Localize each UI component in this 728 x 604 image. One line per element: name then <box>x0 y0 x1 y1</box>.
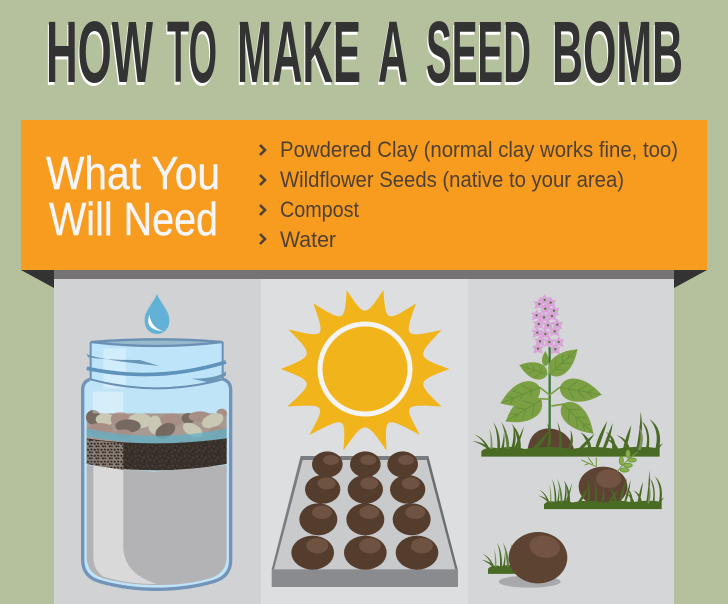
icon: water drop <box>145 294 169 334</box>
seed ball <box>579 467 627 507</box>
grass <box>473 412 663 457</box>
title: A <box>377 7 407 104</box>
title: A <box>378 4 408 101</box>
ingredient list <box>260 137 678 252</box>
icon: glass jar <box>83 339 231 589</box>
ball shadow <box>499 576 561 588</box>
seed balls <box>291 451 438 570</box>
banner shadow <box>54 270 674 279</box>
stones layer <box>86 409 227 443</box>
title: SEED <box>425 7 530 104</box>
water band <box>87 428 227 445</box>
title <box>45 4 683 104</box>
glass highlight <box>93 392 123 413</box>
jar neck <box>91 342 223 387</box>
title: HOW <box>46 4 153 101</box>
title: MAKE <box>237 4 361 101</box>
ribbon fold right <box>674 270 707 288</box>
title: SEED <box>426 4 531 101</box>
ingredient list: Compost <box>280 197 359 222</box>
heading: what you will need: Will Need <box>49 193 218 245</box>
ribbon fold left <box>21 270 54 288</box>
icon: grown plant on grass <box>473 294 663 457</box>
ingredient list: Water <box>280 227 336 252</box>
panel: step 3 background <box>468 270 674 604</box>
ingredient list: Powdered Clay (normal clay works fine, too) <box>280 137 678 162</box>
soil layer <box>87 438 227 470</box>
seed ball <box>509 532 567 583</box>
ingredient list: Wildflower Seeds (native to your area) <box>280 167 624 192</box>
title: TO <box>166 7 216 104</box>
jar outline <box>83 379 231 589</box>
icon: seed ball on ground <box>481 532 624 588</box>
icon: drying tray with seed balls <box>272 451 458 587</box>
title: MAKE <box>236 7 360 104</box>
grass <box>538 470 664 509</box>
panel: step 1 background <box>54 270 261 604</box>
mound <box>527 428 575 452</box>
tray <box>272 456 458 569</box>
stem <box>546 347 553 430</box>
jar threads <box>87 354 159 366</box>
title: TO <box>167 4 217 101</box>
sand layer <box>87 465 227 585</box>
title: HOW <box>45 7 152 104</box>
jar body glass <box>83 379 231 589</box>
icon: sun <box>281 290 449 451</box>
panel: step 2 background <box>261 270 468 604</box>
sprouts <box>581 450 638 472</box>
grass tuft <box>482 542 516 574</box>
heading: what you will need: What You <box>46 147 220 199</box>
leaves <box>496 377 544 414</box>
panel: what you will need <box>21 120 707 270</box>
heading: what you will need <box>46 147 220 245</box>
icon: sprouting seed ball on grass <box>538 450 664 509</box>
flower spike <box>531 294 564 354</box>
